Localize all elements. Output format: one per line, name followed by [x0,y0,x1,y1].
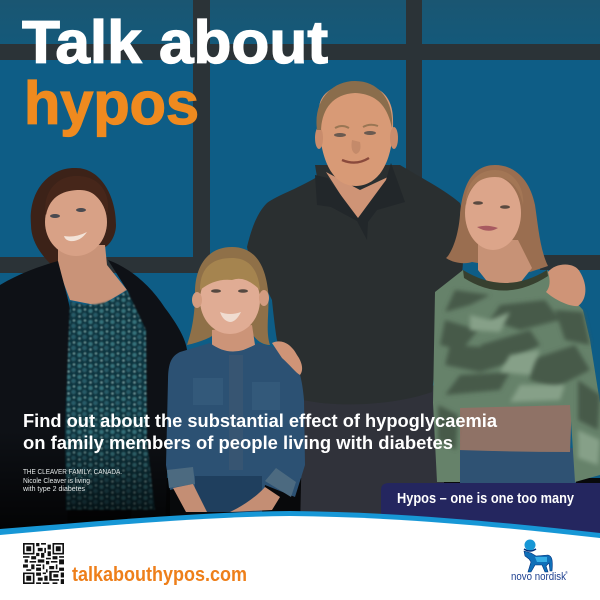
white footer with blue curve [0,511,600,600]
caption: THE CLEAVER FAMILY, CANADA. [23,469,122,476]
caption: with type 2 diabetes [22,486,85,493]
caption: Nicole Cleaver is living [23,478,90,485]
slogan box [381,483,600,540]
novo nordisk logo [511,540,568,583]
person: mother [0,168,187,535]
man's hand on daughter's shoulder [546,264,585,306]
camo blobs [438,290,600,450]
novo nordisk logo: ® [565,570,568,575]
caption [22,469,122,493]
website url: talkabouthypos.com [72,564,247,586]
icon: bull with disc [524,540,552,572]
body text: on family members of people living with diabetes [23,433,453,453]
slogan box: Hypos – one is one too many [397,491,574,507]
title: hypos [24,70,199,137]
title: Talk about [22,9,328,76]
person: man [247,81,466,530]
man's hand on younger daughter's shoulder [272,341,302,375]
dark floor shadow [0,478,600,540]
novo nordisk logo: novo nordisk [511,571,566,583]
QR code [23,543,64,584]
body text: Find out about the substantial effect of hypoglycaemia [23,411,498,431]
person: older daughter [433,165,600,490]
person: younger daughter [166,247,305,512]
title [22,9,328,137]
photo: family of four [0,81,600,540]
body text [23,411,498,453]
